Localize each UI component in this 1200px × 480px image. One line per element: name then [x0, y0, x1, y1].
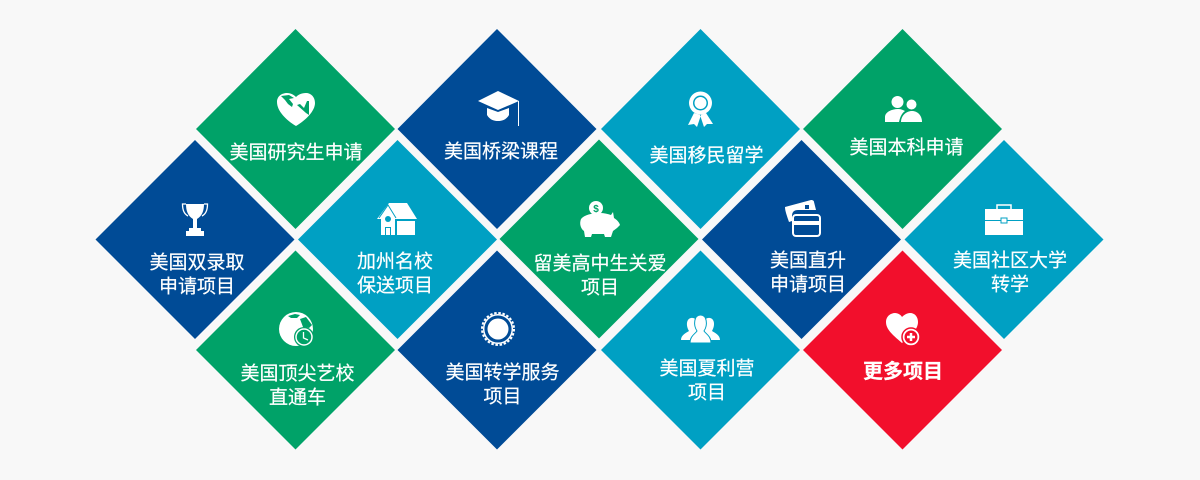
- panel: 美国社区大学转学: [904, 140, 1104, 339]
- panel: 加州名校保送项目: [298, 140, 497, 339]
- label: 美国顶尖艺校: [240, 362, 355, 384]
- diamond: green: [196, 29, 395, 229]
- label: 美国本科申请: [849, 136, 964, 158]
- diamond: green: [196, 250, 395, 450]
- diamond: teal: [904, 140, 1104, 339]
- icon: piggy bank: $: [593, 204, 599, 215]
- icon: sun seal: [482, 313, 514, 345]
- panel: 美国转学服务项目: [398, 250, 596, 450]
- label: [149, 252, 245, 298]
- label: 美国转学服务: [445, 362, 560, 384]
- icon: heart with plus: [886, 313, 920, 346]
- icon: heart with hands: [277, 93, 315, 126]
- icon: graduation cap: [478, 91, 519, 126]
- icon: credit cards: [785, 200, 820, 236]
- diamond: teal: [601, 29, 800, 229]
- diamond: navy: [398, 29, 596, 229]
- diamond: navy: [702, 140, 901, 339]
- panel: 美国桥梁课程: [398, 29, 596, 229]
- label: 转学: [991, 274, 1029, 296]
- panel: 留美高中生关爱项目: [500, 140, 698, 338]
- diamond: teal: [298, 140, 497, 339]
- label: [240, 362, 355, 408]
- icon: briefcase: [985, 205, 1023, 235]
- label: [659, 358, 755, 404]
- label: 美国社区大学: [953, 250, 1067, 272]
- panel: 美国直升申请项目: [702, 140, 901, 339]
- panel: 更多项目: [803, 250, 1002, 450]
- label: 项目: [688, 382, 726, 404]
- icon: piggy bank: [580, 201, 620, 237]
- label: [533, 252, 667, 298]
- label: 项目: [483, 386, 522, 408]
- panel: 美国研究生申请: [196, 29, 395, 229]
- diamond: teal: [601, 250, 800, 450]
- label: 美国双录取: [149, 252, 245, 274]
- panel: 美国顶尖艺校直通车: [196, 250, 395, 450]
- diamond: green: [803, 29, 1002, 229]
- label: [445, 362, 560, 408]
- icon: three people: [681, 315, 720, 343]
- label: 美国直升: [770, 250, 846, 272]
- icon: two people: [885, 96, 922, 122]
- diamond: green: [500, 140, 698, 338]
- label: 加州名校: [357, 250, 433, 272]
- diamond: navy: [96, 140, 294, 339]
- icon: globe with clock: [279, 312, 314, 347]
- label: 项目: [581, 278, 619, 298]
- label: 申请项目: [770, 274, 846, 296]
- label: 美国夏利营: [659, 358, 755, 380]
- panel: 美国夏利营项目: [601, 250, 800, 450]
- icon: award ribbon: [688, 92, 713, 127]
- diamond: navy: [398, 250, 596, 450]
- label: 申请项目: [159, 276, 235, 298]
- label: 美国移民留学: [649, 144, 764, 166]
- label: [770, 250, 846, 296]
- icon: trophy: [182, 204, 208, 236]
- diamond: red: [803, 250, 1002, 450]
- panel: 美国本科申请: [803, 29, 1002, 229]
- label: 保送项目: [357, 274, 433, 296]
- label: 直通车: [269, 386, 326, 408]
- icon: house: [377, 203, 417, 235]
- label: [357, 250, 433, 296]
- panel: 美国双录取申请项目: [96, 140, 294, 339]
- label: [953, 250, 1067, 296]
- label: 美国桥梁课程: [444, 140, 558, 162]
- label: 更多项目: [863, 360, 943, 383]
- label: 美国研究生申请: [229, 142, 363, 164]
- label: 留美高中生关爱: [533, 252, 667, 274]
- panel: 美国移民留学: [601, 29, 800, 229]
